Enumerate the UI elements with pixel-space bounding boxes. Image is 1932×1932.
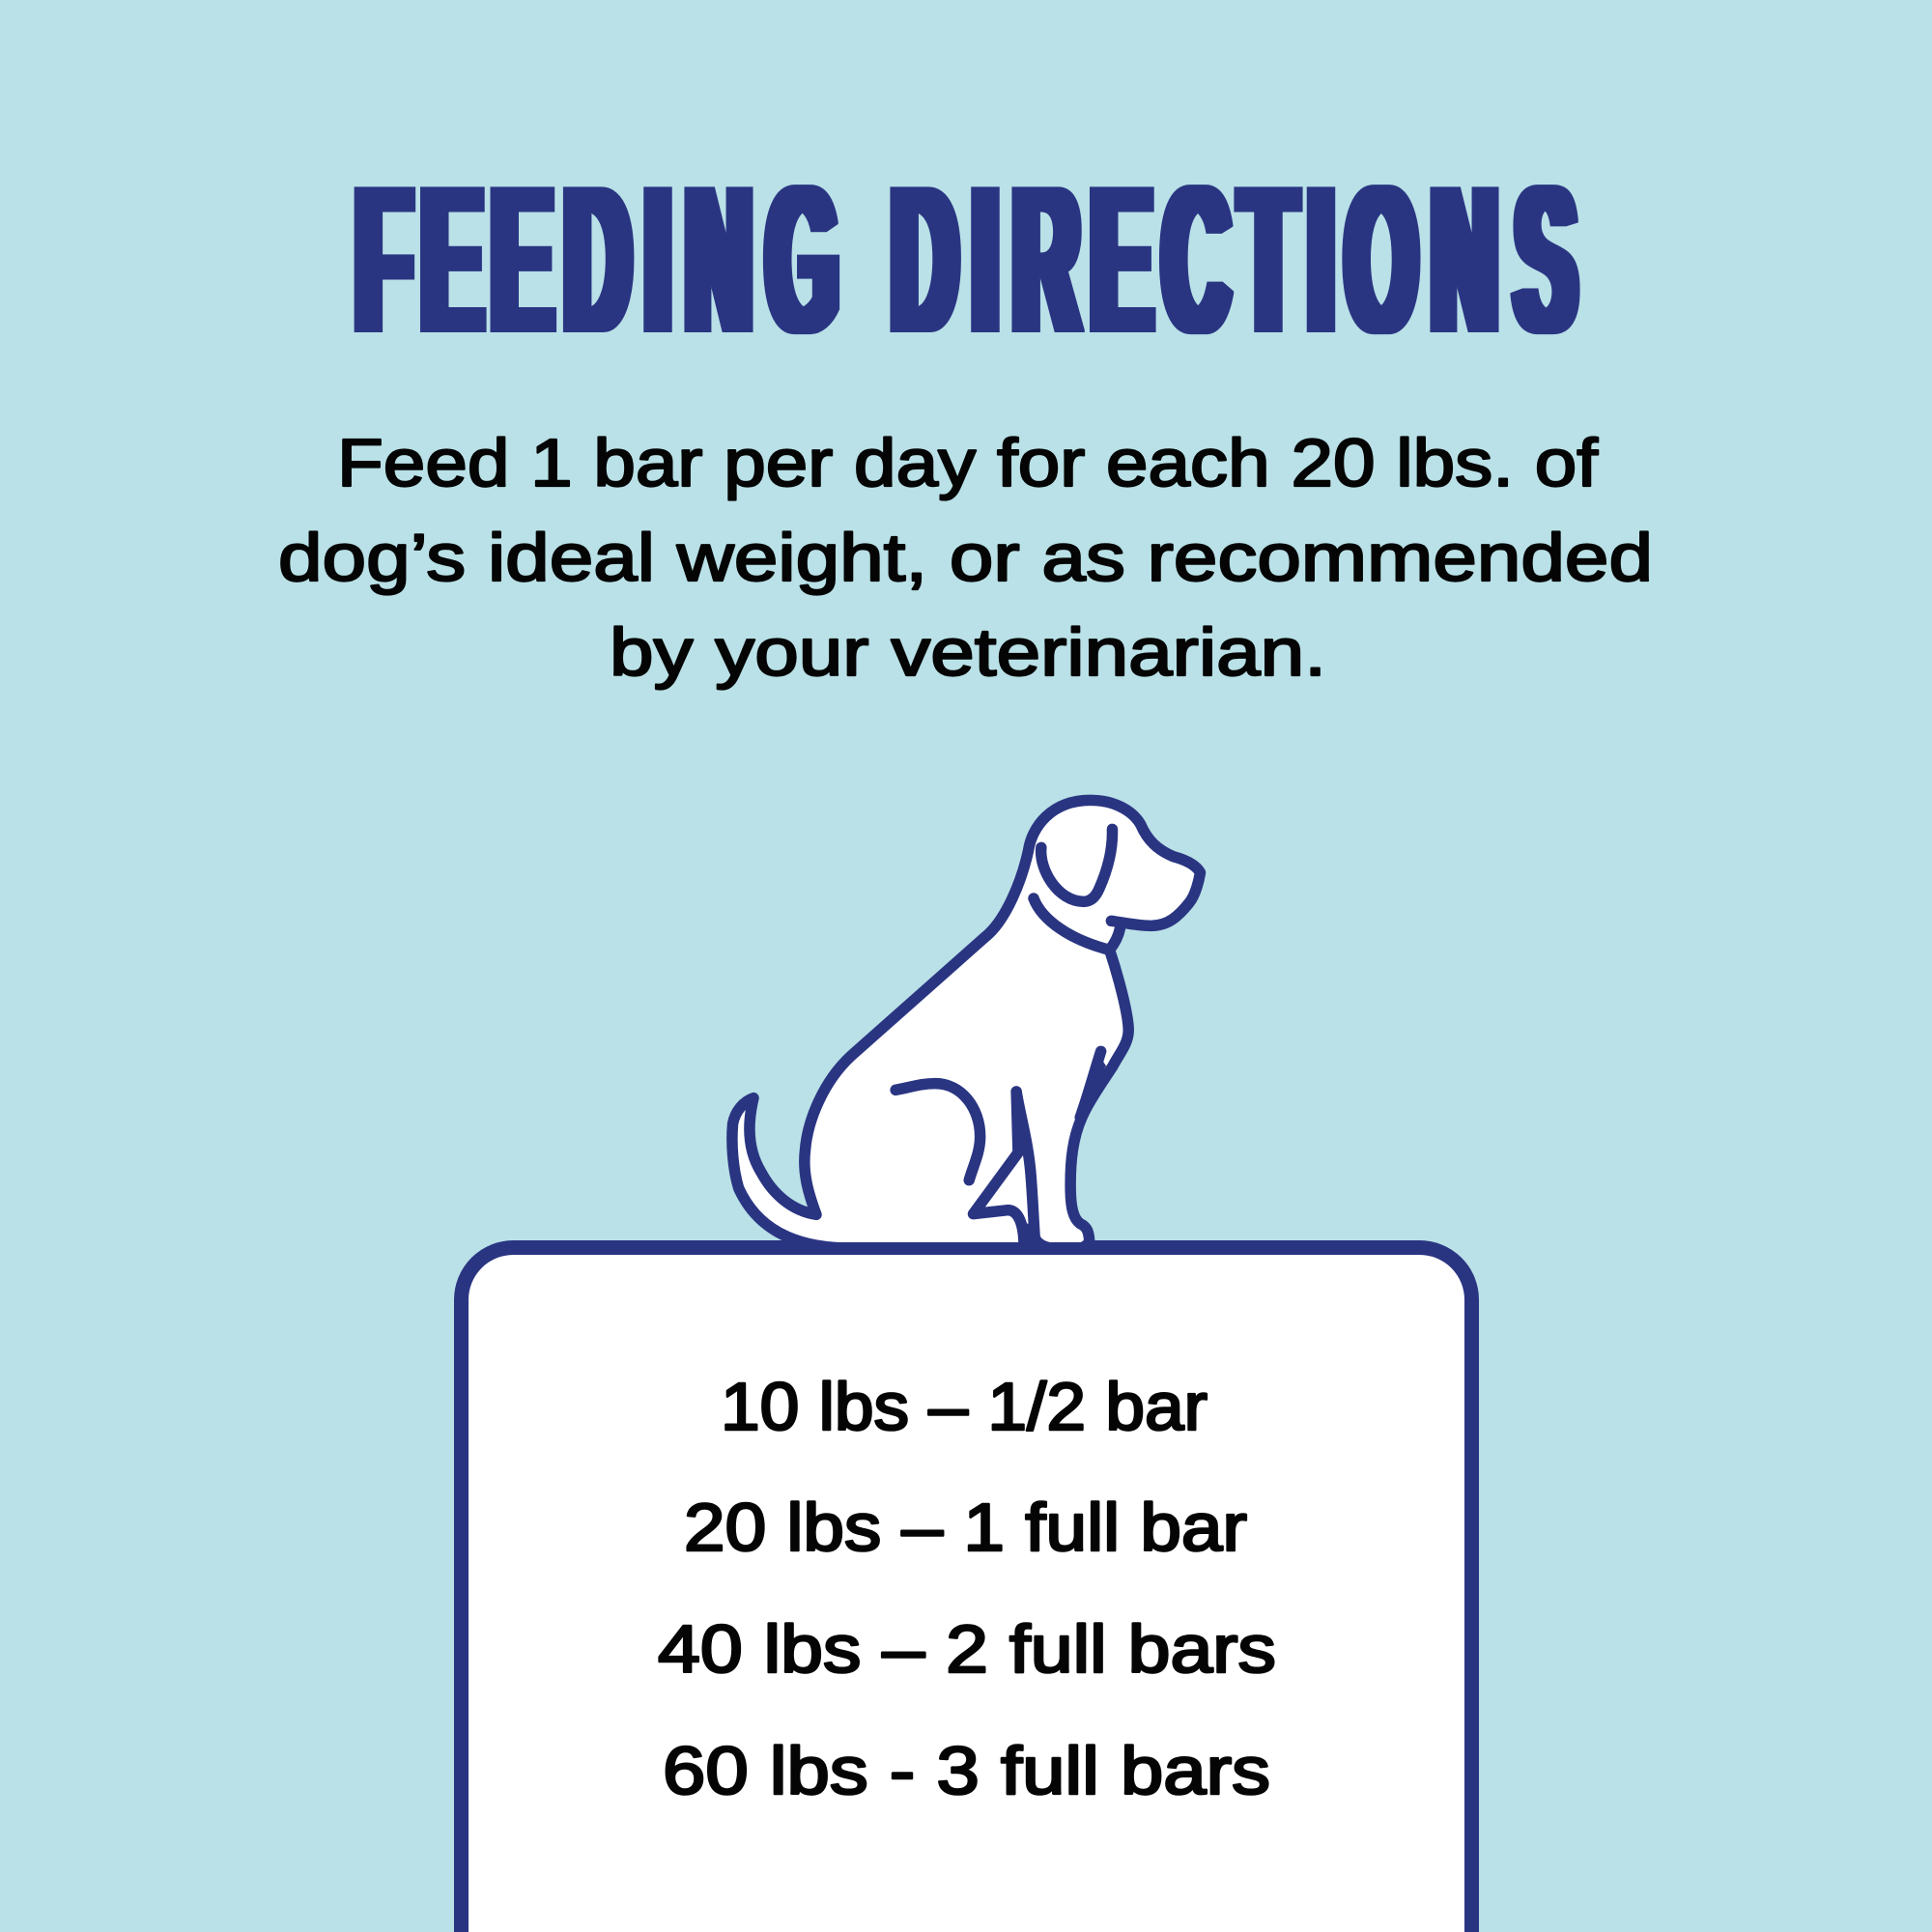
hind foot corner [1075, 1240, 1095, 1246]
chest wedge [1078, 1053, 1106, 1114]
row: 20 lbs: 20 lbs – 1 full bar [684, 1490, 1247, 1565]
panel: feeding amounts [462, 1248, 1472, 1932]
intro paragraph: dog’s ideal weight, or as recommended [278, 520, 1653, 595]
intro paragraph: by your veterinarian. [610, 614, 1326, 690]
front leg foot [1020, 1224, 1058, 1246]
row: 10 lbs: 10 lbs – 1/2 bar [721, 1369, 1208, 1444]
title: FEEDING DIRECTIONS [355, 143, 1576, 377]
intro paragraph [278, 425, 1653, 690]
icon: sitting dog [732, 800, 1200, 1248]
row: 60 lbs: 60 lbs - 3 full bars [663, 1733, 1270, 1808]
row: 40 lbs: 40 lbs – 2 full bars [658, 1611, 1276, 1687]
intro paragraph: Feed 1 bar per day for each 20 lbs. of [337, 425, 1599, 500]
